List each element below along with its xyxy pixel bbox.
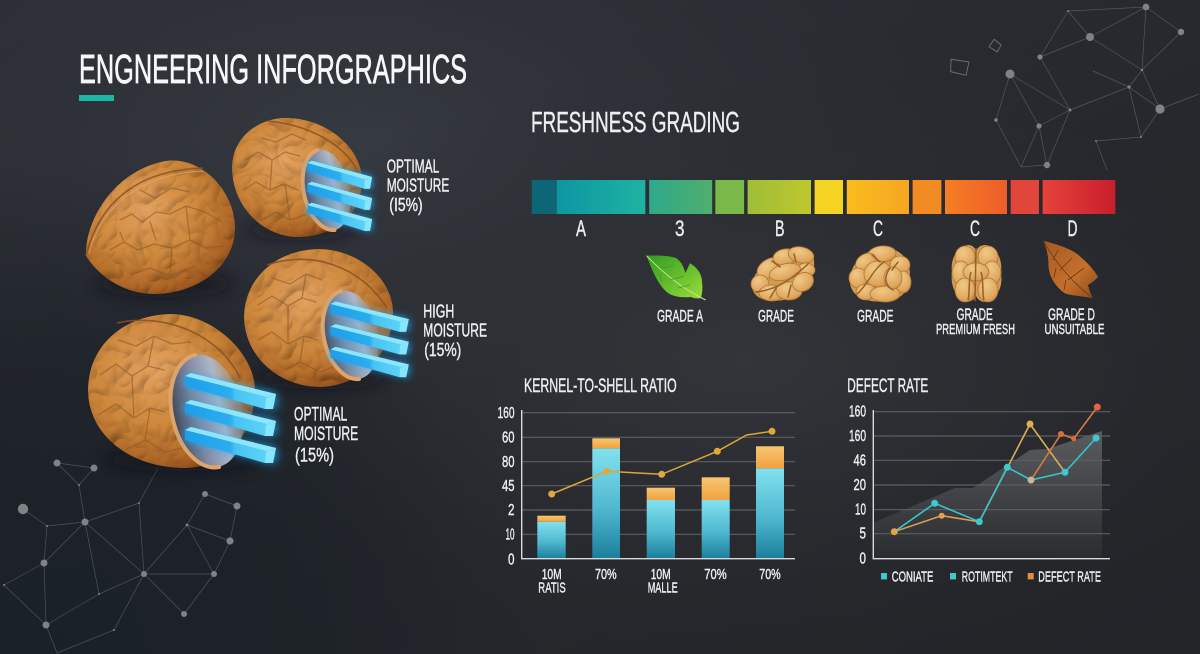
y axis labels: 160: [849, 404, 866, 421]
grade labels: GRADE D: [1048, 305, 1095, 324]
legend: DEFECT RATE: [1038, 569, 1101, 586]
walnut: middle with moisture bars: [244, 249, 409, 389]
scale letters: A: [576, 216, 586, 241]
grid lines: [874, 412, 1110, 534]
walnut: bottom with moisture bars: [88, 314, 276, 474]
moisture label: bottom: MOISTURE: [294, 424, 358, 445]
walnut: closed: [86, 160, 235, 297]
moisture label: bottom: (15%): [295, 446, 334, 467]
icon: walnut kernel 2: [849, 245, 911, 302]
orange line: [894, 516, 979, 532]
title accent bar: [79, 95, 114, 101]
freshness gradient scale: [532, 180, 1115, 214]
stacked bars: [537, 438, 784, 558]
moisture label: middle: [423, 302, 487, 360]
grade labels: PREMIUM FRESH: [936, 322, 1015, 338]
chart: kernel-to-shell ratio: [498, 376, 795, 597]
y axis labels: 160: [849, 428, 866, 445]
moisture label: middle: HIGH: [423, 302, 454, 322]
moisture label: top: MOISTURE: [387, 176, 449, 196]
y axis labels: 0: [860, 550, 866, 567]
grade labels: UNSUITABLE: [1044, 322, 1105, 338]
scale letters: D: [1068, 216, 1078, 241]
heading: freshness grading: FRESHNESS GRADING: [531, 107, 740, 139]
moisture label: top: [387, 157, 449, 215]
y axis labels: 10: [506, 526, 515, 543]
y axis labels: 5: [860, 526, 866, 543]
y axis labels: 60: [502, 430, 515, 447]
network decoration: top right: [951, 4, 1199, 170]
y axis labels: 46: [854, 453, 866, 470]
grade labels: GRADE: [956, 305, 993, 324]
grade labels: GRADE A: [657, 307, 703, 326]
x axis labels: 10M: [542, 566, 562, 583]
legend: [881, 569, 1101, 586]
scale letters: C: [970, 216, 980, 241]
x axis labels: RATIS: [538, 580, 566, 597]
y axis labels: 160: [498, 405, 515, 422]
moisture label: bottom: OPTIMAL: [294, 405, 347, 426]
axes: [522, 410, 795, 559]
x axis labels: 70%: [759, 566, 781, 583]
walnut: top with moisture bars: [232, 118, 372, 240]
y axis labels: 10: [855, 501, 866, 518]
gold line: [979, 424, 1065, 522]
grade labels: [657, 305, 1105, 338]
chart title: KERNEL-TO-SHELL RATIO: [524, 376, 677, 397]
data points: [891, 404, 1101, 535]
y axis labels: 0: [508, 551, 515, 568]
moisture label: bottom: [294, 405, 358, 467]
legend: CONIATE: [892, 569, 933, 586]
icon: walnut kernel 3: [952, 245, 1001, 302]
area fill: [873, 431, 1102, 559]
y axis labels: 45: [502, 478, 514, 495]
scale letters: [576, 216, 1078, 241]
network decoration: bottom left: [3, 460, 240, 653]
icon: dry brown leaf: [1043, 241, 1098, 298]
moisture label: middle: MOISTURE: [423, 320, 487, 340]
icon: walnut kernel 1: [751, 244, 817, 301]
icon: green leaf: [646, 255, 706, 300]
x axis labels: 10M: [651, 566, 671, 583]
y axis labels: 80: [502, 454, 515, 471]
moisture bars: [185, 373, 276, 463]
y axis labels: 20: [854, 477, 866, 494]
scale letters: 3: [675, 216, 684, 241]
legend: ROTIMTEKT: [962, 569, 1013, 586]
x axis labels: MALLE: [648, 580, 678, 597]
trend line: [548, 428, 776, 498]
chart: defect rate: [847, 376, 1110, 586]
moisture bars: [330, 301, 409, 377]
moisture label: middle: (15%): [424, 340, 461, 360]
y axis labels: [849, 404, 866, 567]
scale letters: B: [775, 216, 784, 241]
grade labels: GRADE: [758, 307, 794, 326]
axes: [873, 410, 1110, 559]
moisture label: top: (I5%): [389, 195, 423, 215]
x axis labels: 70%: [704, 566, 727, 583]
moisture bars: [308, 161, 372, 231]
cyan line: [894, 438, 1096, 532]
y axis labels: 2: [508, 502, 514, 519]
x axis labels: 70%: [595, 566, 617, 583]
scale letters: C: [873, 216, 883, 241]
defect rate line: [1031, 407, 1097, 480]
y axis labels: [498, 405, 515, 568]
grid lines: [522, 413, 795, 534]
title: ENGNEERING INFORGRAPHICS: [79, 46, 467, 92]
grade labels: GRADE: [857, 307, 894, 326]
moisture label: top: OPTIMAL: [387, 157, 439, 177]
chart title: DEFECT RATE: [847, 376, 928, 397]
x axis labels: [538, 566, 781, 597]
